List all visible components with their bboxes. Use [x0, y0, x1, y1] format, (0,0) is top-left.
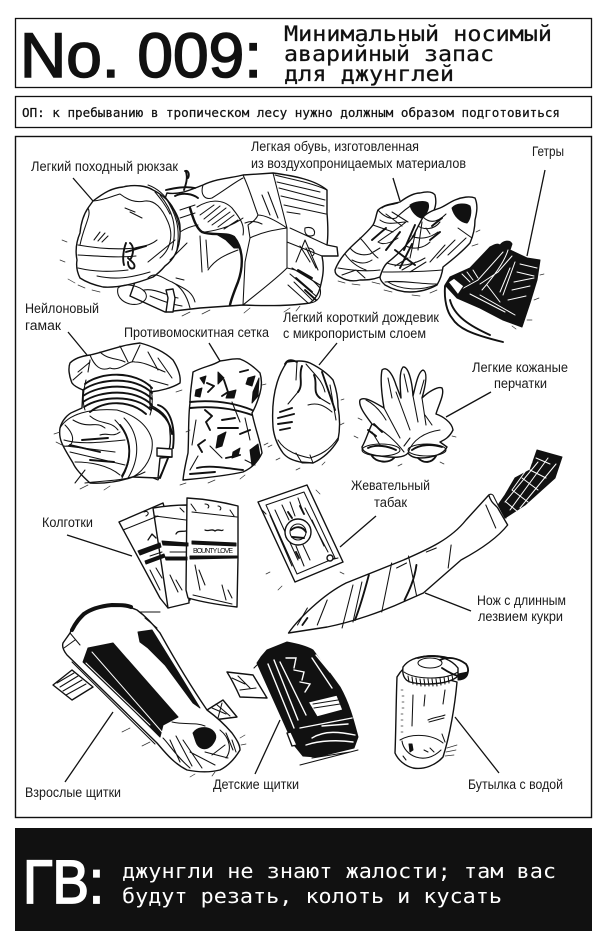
title text: аварийный запас [284, 42, 494, 66]
label: net: Противомоскитная сетка [124, 325, 269, 340]
arrow: hammock [68, 332, 87, 355]
icon: child shin guard [227, 642, 358, 765]
label: raincoat: Легкий короткий дождевик [283, 310, 439, 325]
arrow: water bottle [455, 717, 499, 773]
premise text: ОП: к пребыванию в тропическом лесу нужно должным образом подготовиться [22, 105, 560, 120]
label: hammock [25, 301, 99, 333]
arrow: tobacco [340, 516, 376, 547]
label: water bottle: Бутылка с водой [468, 777, 563, 792]
icon: mosquito net [180, 359, 268, 485]
label: knife [477, 593, 566, 624]
icon: shoes [335, 192, 480, 296]
arrow: raincoat [319, 343, 337, 365]
arrow: backpack [73, 178, 93, 201]
conclusion text [122, 859, 556, 908]
label: tobacco: Жевательный [351, 478, 430, 493]
label: child guards: Детские щитки [213, 777, 299, 792]
label: raincoat: с микропористым слоем [283, 326, 426, 341]
title number: No. 009: [20, 21, 262, 91]
label: tobacco [351, 478, 430, 510]
title panel [16, 18, 592, 91]
label: gloves: Легкие кожаные [472, 360, 568, 375]
arrow: child guards [255, 720, 280, 774]
icon: adult shin guard [53, 605, 246, 777]
icon: kukri knife [289, 450, 562, 633]
conclusion text: будут резать, колоть и кусать [122, 884, 502, 908]
pack brand text: BOUNTY LOVE [193, 548, 233, 555]
label: backpack: Легкий походный рюкзак [31, 159, 178, 174]
label: gaiters: Гетры [532, 144, 564, 159]
arrow: pantyhose [67, 535, 132, 556]
label: knife: лезвием кукри [478, 609, 563, 624]
title text: для джунглей [284, 62, 454, 86]
panel: equipment [16, 136, 592, 818]
conclusion text: джунгли не знают жалости; там вас [122, 859, 556, 883]
premise panel [16, 96, 592, 128]
label: gloves [472, 360, 568, 391]
arrow: gloves [446, 392, 491, 417]
arrow: shoes [393, 178, 400, 201]
label: gloves: перчатки [494, 376, 547, 391]
arrow: knife [425, 593, 471, 611]
icon: gaiters [445, 241, 544, 342]
label: tobacco: табак [374, 495, 407, 510]
conclusion heading: ГВ: [23, 848, 104, 916]
title text: Минимальный носимый [284, 22, 552, 46]
label: shoes [251, 139, 466, 171]
conclusion panel [15, 828, 592, 931]
icon: raincoat [268, 360, 344, 470]
label: raincoat [283, 310, 439, 341]
arrow: gaiters [527, 170, 545, 256]
icon: gloves [354, 367, 456, 466]
label: hammock: гамак [25, 318, 61, 333]
title text [284, 22, 552, 86]
label: knife: Нож с длинным [477, 593, 566, 608]
icon: water bottle [395, 656, 468, 768]
arrow: net [209, 343, 220, 361]
label: hammock: Нейлоновый [25, 301, 99, 316]
icon: chewing tobacco [258, 485, 344, 590]
label: pantyhose: Колготки [42, 515, 93, 530]
icon: pantyhose packs [119, 498, 238, 608]
label: adult guards: Взрослые щитки [25, 785, 121, 800]
icon: hammock [54, 343, 182, 490]
arrow: adult guards [65, 712, 113, 782]
icon: backpack [60, 171, 338, 316]
label: shoes: из воздухопроницаемых материалов [251, 156, 466, 171]
label: shoes: Легкая обувь, изготовленная [251, 139, 419, 154]
